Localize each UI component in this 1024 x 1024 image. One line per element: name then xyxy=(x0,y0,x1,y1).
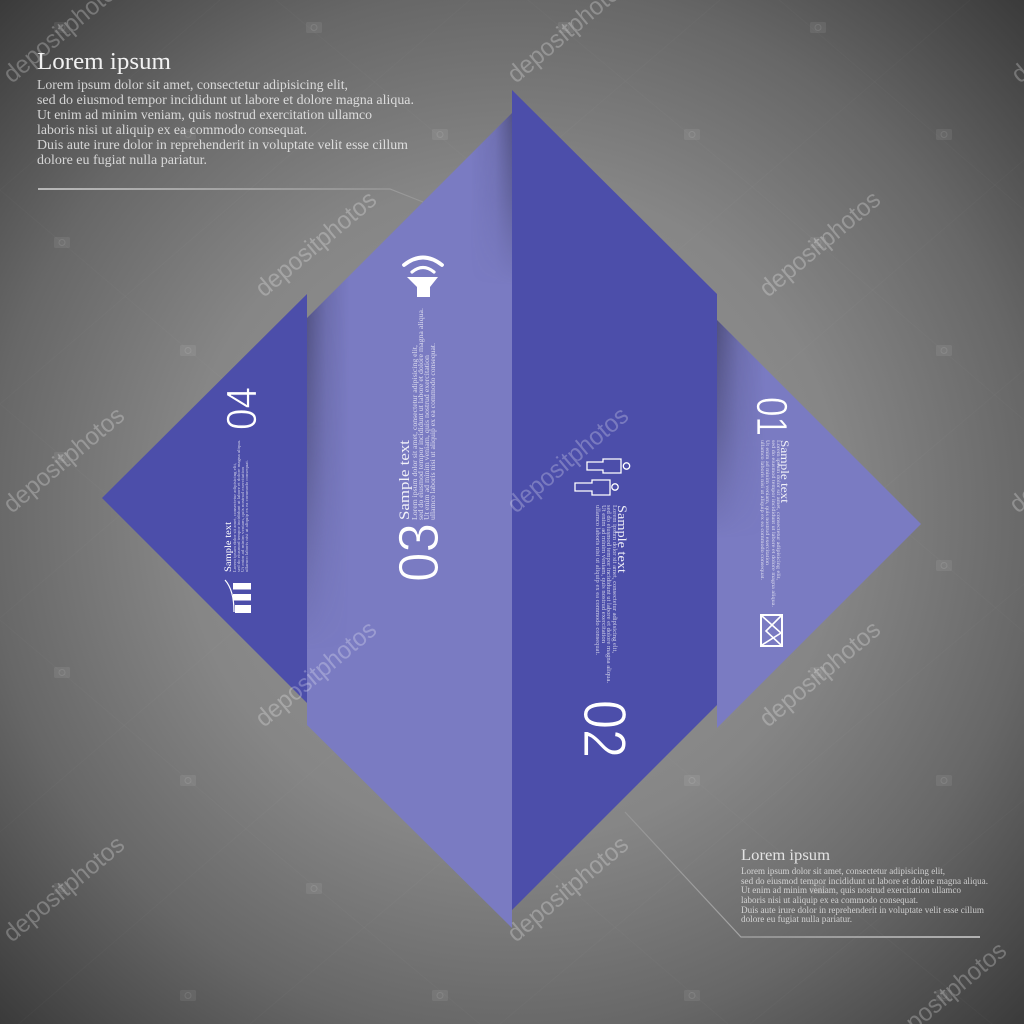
panel 04 text: sed do eiusmod tempor incididunt ut labore et dolore magna aliqua. xyxy=(236,440,241,572)
watermark text: depositphotos xyxy=(754,615,886,733)
panel 03 text xyxy=(410,308,437,520)
panel 02 text xyxy=(594,505,617,684)
icon: bar chart xyxy=(225,580,251,613)
panel 04 text: Lorem ipsum dolor sit amet, consectetur adipisicing elit, xyxy=(232,463,238,572)
bottom right text block: laboris nisi ut aliquip ex ea commodo consequat. xyxy=(741,895,918,905)
top left text block: sed do eiusmod tempor incididunt ut labore et dolore magna aliqua. xyxy=(37,92,414,107)
top left heading: Lorem ipsum xyxy=(37,49,171,75)
bottom right text block: dolore eu fugiat nulla pariatur. xyxy=(741,914,852,924)
panel 03 shape xyxy=(307,105,512,928)
number 02: 02 xyxy=(571,700,638,758)
panel 04 shape xyxy=(102,294,307,703)
panel 01 text: Lorem ipsum dolor sit amet, consectetur adipisicing elit, xyxy=(775,440,781,580)
panel 01 heading: Sample text xyxy=(778,440,792,504)
top left text block: Duis aute irure dolor in reprehenderit in voluptate velit esse cillum xyxy=(37,137,408,152)
icon: speaker with sound waves xyxy=(404,258,442,297)
panel 04 text xyxy=(232,440,249,572)
panel 02 text: ullamco laboris nisi ut aliquip ex ea commodo consequat. xyxy=(594,505,600,656)
panel 04 text: ullamco laboris nisi ut aliquip ex ea commodo consequat. xyxy=(244,460,249,572)
panel 03 heading: Sample text xyxy=(397,439,413,520)
top left text block: Ut enim ad minim veniam, quis nostrud exercitation ullamco xyxy=(37,107,372,122)
panel 01 shape xyxy=(717,318,921,728)
bottom right text block: Lorem ipsum dolor sit amet, consectetur adipisicing elit, xyxy=(741,866,945,876)
panel 02 heading: Sample text xyxy=(615,505,630,573)
panel 04 text: Ut enim ad minim veniam, quis nostrud exercitation xyxy=(240,466,246,572)
panel 01 text xyxy=(759,440,781,607)
watermark text: depositphotos xyxy=(0,401,130,519)
panel 03 text: sed do eiusmod tempor incididunt ut labore et dolore magna aliqua. xyxy=(416,308,425,520)
top left leader line xyxy=(38,189,423,202)
panel 02 text: sed do eiusmod tempor incididunt ut labore et dolore magna aliqua. xyxy=(605,505,611,684)
icon: two bottles xyxy=(575,459,630,495)
bottom right text block xyxy=(741,866,988,924)
top left text block: Lorem ipsum dolor sit amet, consectetur adipisicing elit, xyxy=(37,77,348,92)
watermark text: depositphotos xyxy=(502,401,634,519)
top left text block xyxy=(37,77,414,167)
icon: envelope xyxy=(761,615,782,646)
panel 03 text: ullamco laboris nisi ut aliquip ex ea commodo consequat. xyxy=(428,343,437,520)
panel 02 shape xyxy=(512,90,717,910)
bottom right text block: Duis aute irure dolor in reprehenderit in voluptate velit esse cillum xyxy=(741,905,984,915)
bottom right heading: Lorem ipsum xyxy=(741,847,831,864)
watermark text: depositphotos xyxy=(250,615,382,733)
watermark text: depositphotos xyxy=(754,185,886,303)
panel 01 text: Ut enim ad minim veniam, quis nostrud exercitation xyxy=(764,440,770,565)
panel 03 text: Lorem ipsum dolor sit amet, consectetur adipisicing elit, xyxy=(410,345,419,520)
panel 02 text: Lorem ipsum dolor sit amet, consectetur adipisicing elit, xyxy=(611,505,617,654)
panel 04 heading: Sample text xyxy=(224,522,234,572)
bottom right text block: sed do eiusmod tempor incididunt ut labore et dolore magna aliqua. xyxy=(741,876,988,886)
panel 01 text: sed do eiusmod tempor incididunt ut labore et dolore magna aliqua. xyxy=(770,440,776,607)
panel 01 text: ullamco laboris nisi ut aliquip ex ea commodo consequat. xyxy=(759,440,765,580)
panel 02 text: Ut enim ad minim veniam, quis nostrud exercitation xyxy=(600,505,606,643)
top left text block: dolore eu fugiat nulla pariatur. xyxy=(37,152,207,167)
number 04: 04 xyxy=(218,387,266,430)
panel 03 text: Ut enim ad minim veniam, quis nostrud exercitation xyxy=(422,355,431,520)
number 03: 03 xyxy=(387,523,451,582)
bottom right text block: Ut enim ad minim veniam, quis nostrud exercitation ullamco xyxy=(741,885,961,895)
number 01: 01 xyxy=(747,397,796,436)
watermark text: depositphotos xyxy=(502,830,634,948)
bottom right leader line xyxy=(625,812,980,937)
watermark text: depositphotos xyxy=(0,830,130,948)
watermark text: depositphotos xyxy=(250,185,382,303)
top left text block: laboris nisi ut aliquip ex ea commodo consequat. xyxy=(37,122,307,137)
